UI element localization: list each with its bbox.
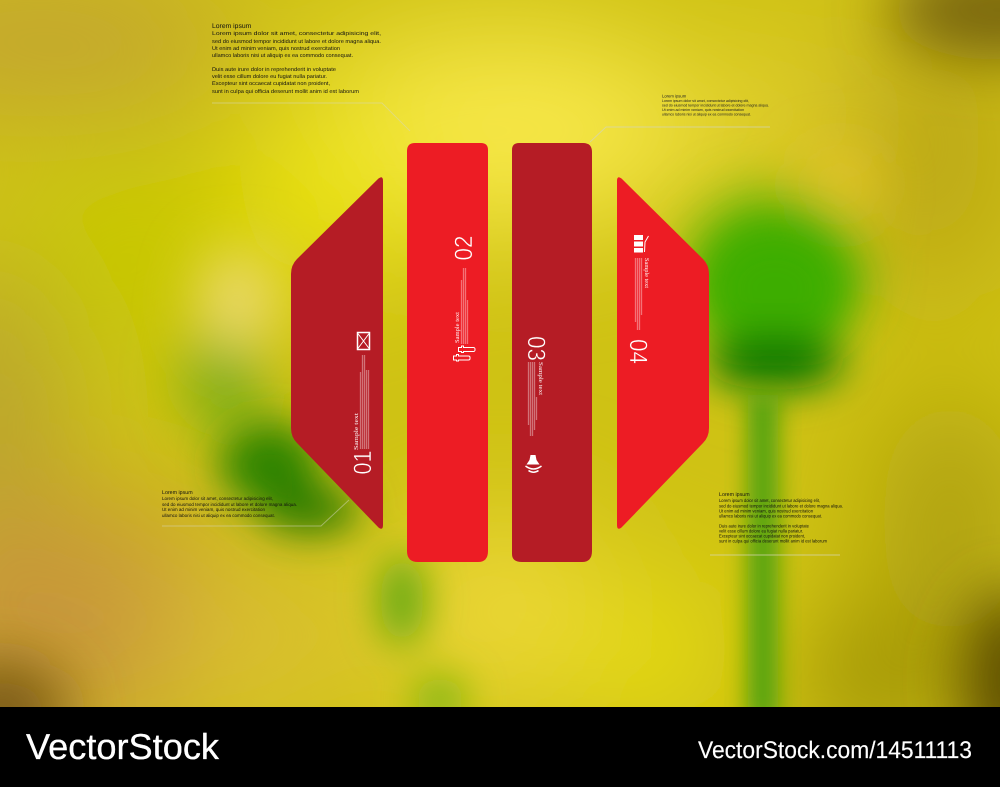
footer logo: VectorStock <box>26 726 220 767</box>
text block: bottom right: sed do eiusmod tempor incididunt ut labore et dolore magna aliqua. <box>719 504 843 508</box>
text block: top left: Ut enim ad minim veniam, quis nostrud exercitation <box>212 46 340 52</box>
label: sample text 01: Sample text <box>353 413 360 450</box>
text block: top left: Duis aute irure dolor in reprehenderit in voluptate <box>212 67 336 73</box>
leader line: bottom right <box>710 554 840 556</box>
icon: bottles <box>454 346 475 361</box>
footer bar <box>0 707 1000 787</box>
text block: bottom right: Lorem ipsum dolor sit amet, consectetur adipisicing elit, <box>719 498 820 503</box>
panel 04: right trapezoid <box>617 177 709 529</box>
text block: bottom right: ullamco laboris nisi ut aliquip ex ea commodo consequat. <box>719 514 822 518</box>
text block: bottom left <box>162 490 297 518</box>
label: sample text 02: Sample text <box>454 312 461 343</box>
panel 02: bright red bar <box>407 143 488 562</box>
text block: bottom left: Lorem ipsum <box>162 490 193 496</box>
text block: bottom right: Excepteur sint occaecat cupidatat non proident, <box>719 534 805 538</box>
text block: top right: Lorem ipsum <box>662 94 687 98</box>
panel 03: dark red bar <box>512 143 592 562</box>
body lines 01 <box>360 355 368 449</box>
text block: bottom right <box>719 492 843 544</box>
text block: bottom right: Lorem ipsum <box>719 492 750 498</box>
text block: top left: sunt in culpa qui officia deserunt mollit anim id est laborum <box>212 89 360 95</box>
text block: top right: sed do eiusmod tempor incididunt ut labore et dolore magna aliqua. <box>662 104 769 108</box>
text block: bottom left: Ut enim ad minim veniam, quis nostrud exercitation <box>162 507 265 512</box>
body lines 02 <box>462 268 468 344</box>
number 03: 03 <box>522 336 550 361</box>
text block: bottom left: ullamco laboris nisi ut aliquip ex ea commodo consequat. <box>162 513 275 518</box>
text block: top right: Ut enim ad minim veniam, quis nostrud exercitation <box>662 108 744 112</box>
text block: top left: Excepteur sint occaecat cupidatat non proident, <box>212 81 331 87</box>
number 04: 04 <box>624 339 652 364</box>
footer url: VectorStock.com/14511113 <box>698 737 972 764</box>
leader line: top right <box>590 127 770 142</box>
text block: top left: Lorem ipsum <box>212 23 252 30</box>
text block: top left: sed do eiusmod tempor incididunt ut labore et dolore magna aliqua. <box>212 39 381 45</box>
text block: bottom right: sunt in culpa qui officia deserunt mollit anim id est laborum <box>719 538 827 544</box>
body lines 04 <box>636 258 642 330</box>
text block: bottom right: velit esse cillum dolore eu fugiat nulla pariatur. <box>719 528 803 534</box>
number 01: 01 <box>349 450 377 474</box>
text block: bottom right: Ut enim ad minim veniam, quis nostrud exercitation <box>719 508 813 514</box>
text block: top left: velit esse cillum dolore eu fugiat nulla pariatur. <box>212 74 327 80</box>
body lines 03 <box>528 362 536 436</box>
text block: top left: Lorem ipsum dolor sit amet, consectetur adipisicing elit, <box>212 31 382 37</box>
text block: top right: Lorem ipsum dolor sit amet, consectetur adipisicing elit, <box>662 99 749 103</box>
text block: bottom right: Duis aute irure dolor in reprehenderit in voluptate <box>719 524 809 528</box>
text block: bottom left: Lorem ipsum dolor sit amet, consectetur adipisicing elit, <box>162 496 273 501</box>
text block: top right <box>662 94 769 116</box>
leader line: top left <box>212 103 410 131</box>
label: sample text 04: Sample text <box>643 258 650 288</box>
number 02: 02 <box>450 236 478 260</box>
icon: bar chart <box>634 235 648 252</box>
text block: top left: ullamco laboris nisi ut aliquip ex ea commodo consequat. <box>212 53 353 59</box>
icon: envelope <box>358 332 370 350</box>
text block: bottom left: sed do eiusmod tempor incididunt ut labore et dolore magna aliqua. <box>162 502 297 507</box>
leader line: bottom left <box>162 500 349 526</box>
label: sample text 03: Sample text <box>537 362 544 395</box>
panel 01: left trapezoid <box>291 177 383 529</box>
text block: top right: ullamco laboris nisi ut aliquip ex ea commodo consequat. <box>662 112 751 116</box>
text block: top left <box>212 23 382 95</box>
icon: bell with sound waves <box>526 455 542 472</box>
